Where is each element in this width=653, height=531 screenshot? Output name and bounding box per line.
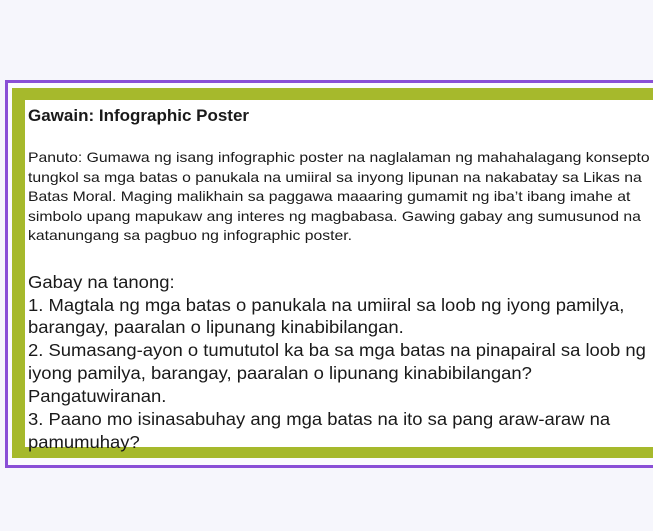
text block: gabay na tanong: 1. Magtala ng mga batas o panukala na umiiral sa loob ng iyong pamilya,	[28, 295, 624, 315]
text block: gabay na tanong: 2. Sumasang-ayon o tumututol ka ba sa mga batas na pinapairal sa loob ng	[28, 340, 646, 360]
text block: panuto: simbolo upang mapukaw ang interes ng magbabasa. Gawing gabay ang sumusunod na	[28, 208, 641, 224]
text block: panuto: katanungang sa pagbuo ng infographic poster.	[28, 227, 352, 243]
panel: white content	[25, 100, 653, 447]
title: Gawain: Infographic Poster	[28, 106, 249, 125]
text block: panuto: Panuto: Gumawa ng isang infographic poster na naglalaman ng mahahalagang konsepto	[28, 149, 650, 165]
text block: panuto	[28, 149, 650, 243]
text block: gabay na tanong: barangay, paaralan o lipunang kinabibilangan.	[28, 317, 404, 337]
panel: green inner frame	[12, 88, 653, 458]
text block: gabay na tanong: iyong pamilya, barangay, paaralan o lipunang kinabibilangan?	[28, 363, 532, 383]
text block: gabay na tanong: Pangatuwiranan.	[28, 386, 166, 406]
text block: gabay na tanong: Gabay na tanong:	[28, 272, 175, 292]
text block: gabay na tanong: pamumuhay?	[28, 432, 140, 452]
panel: purple outer frame	[5, 80, 653, 468]
text block: panuto: tungkol sa mga batas o panukala na umiiral sa inyong lipunan na nakabatay sa Likas na	[28, 169, 642, 185]
text block: panuto: Batas Moral. Maging malikhain sa paggawa maaaring gumamit ng iba’t ibang imahe at	[28, 188, 630, 204]
text block: gabay na tanong: 3. Paano mo isinasabuhay ang mga batas na ito sa pang araw-araw na	[28, 409, 610, 429]
text block: gabay na tanong	[28, 272, 646, 452]
